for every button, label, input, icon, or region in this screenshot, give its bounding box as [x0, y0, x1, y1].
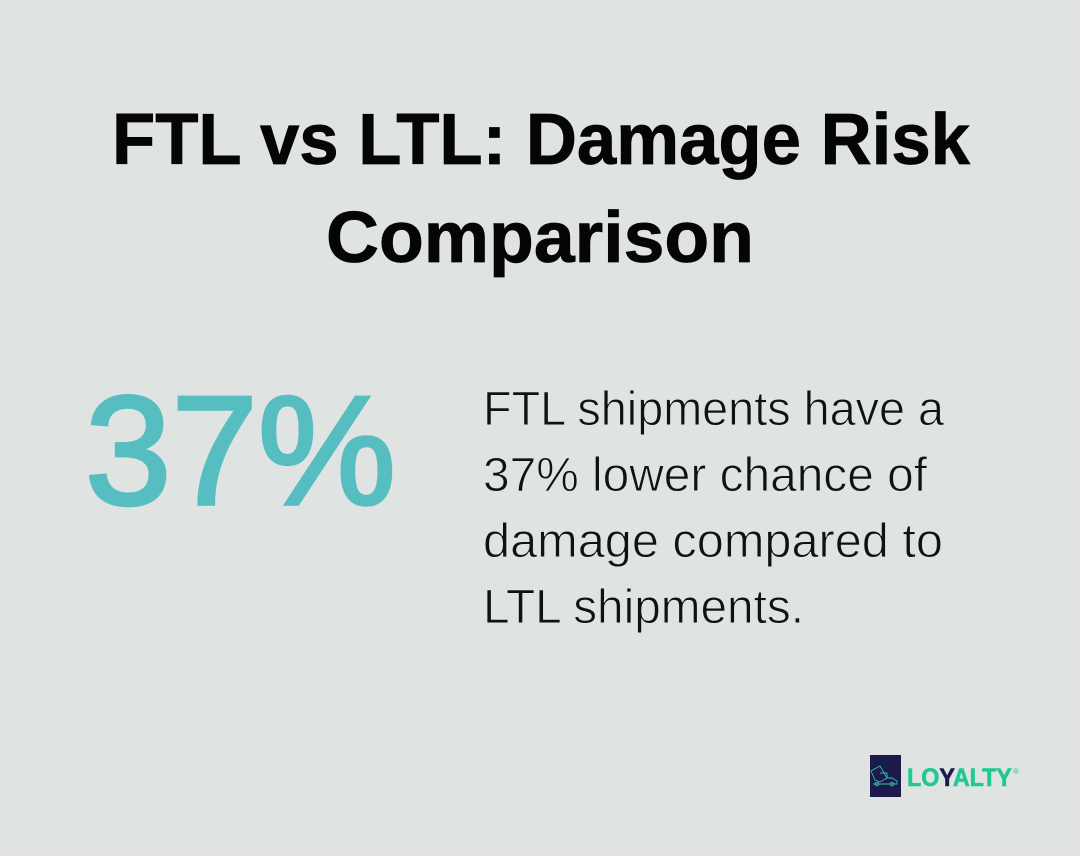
- title: [112, 100, 971, 278]
- icon: truck on navy square: [870, 755, 901, 797]
- registered mark: ®: [1013, 767, 1019, 776]
- title: FTL vs LTL: Damage Risk: [112, 100, 971, 180]
- description text: damage compared to: [483, 515, 943, 568]
- wordmark: LOYALTY: [907, 764, 1012, 792]
- big stat: 37%: 37%: [85, 364, 396, 537]
- description text: [483, 383, 944, 634]
- description text: FTL shipments have a: [483, 383, 944, 436]
- description text: 37% lower chance of: [483, 449, 928, 502]
- logo: Loyalty: [870, 755, 1019, 797]
- title: Comparison: [326, 198, 754, 278]
- description text: LTL shipments.: [483, 581, 804, 634]
